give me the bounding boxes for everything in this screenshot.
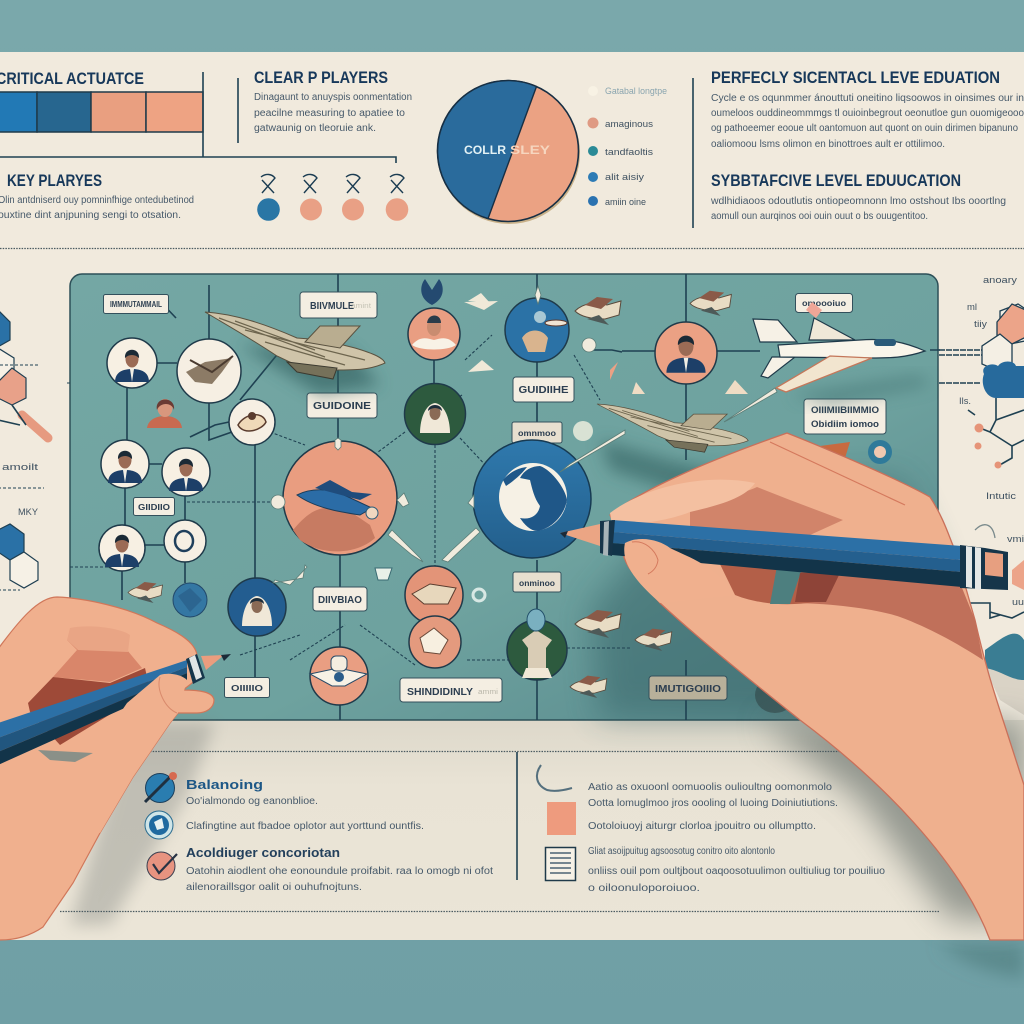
- right margin molecule diagram: tiiy: [974, 319, 987, 330]
- pie chart: [438, 80, 580, 224]
- right margin molecule diagram: Intutic: [986, 491, 1016, 502]
- thumb nail outline: [632, 542, 658, 574]
- text block: right notes: Ootta lomuglmoo jros oooling ol luoing Doiniutiutions.: [588, 798, 838, 809]
- section: key players text: ouxtine dint anjpuning sengi to otsation.: [0, 210, 181, 221]
- map labels: SHINDIDINLY: [407, 687, 473, 698]
- right margin molecule diagram: [939, 275, 1024, 715]
- icon: curved tool: [537, 765, 572, 791]
- node: blue top with vignette: [505, 298, 569, 362]
- text block: right notes: Gliat asoijpuitug agsoosotug conitro oito alontonlo: [588, 846, 775, 857]
- section: key players text: Olin antdniserd ouy pomninfhige ontedubetinod: [0, 195, 194, 206]
- left gap under pencil: [38, 750, 93, 762]
- text block: acknowledgement: ailenoraillsgor oalit oi ouhufnojtuns.: [186, 882, 362, 893]
- map labels: omoooiuo: [802, 299, 846, 308]
- pie legend: alit aisiy: [605, 172, 644, 183]
- node: blue robed: [228, 578, 286, 636]
- section: key players text: [0, 172, 194, 221]
- connection lines: [66, 274, 940, 720]
- section: clear players text: CLEAR P PLAYERS: [254, 69, 388, 87]
- text block: balancing: Oo'ialmondo og eanonblioe.: [186, 796, 318, 807]
- shadow on paper from hands: [70, 722, 1024, 925]
- section: substantive level education: [710, 172, 1006, 222]
- aircraft: white plane: [753, 318, 930, 405]
- map labels: omnmoo: [518, 429, 556, 438]
- map hand shadow: [590, 480, 938, 718]
- text block: right notes: o oiloonuloporoiuoo.: [588, 883, 700, 894]
- node: cream crest: [229, 399, 275, 445]
- node: big blue with globe: [473, 440, 591, 558]
- arrows on map: [271, 286, 777, 585]
- right pencil: [560, 520, 1008, 590]
- person nodes: [99, 322, 717, 571]
- section: substantive level education: aomull oun aurqinos ooi ouin ouut o bs ouugentitoo.: [711, 211, 928, 222]
- node: green statue: [507, 609, 567, 680]
- pie chart: COLLR: [464, 143, 506, 157]
- section: perfectly scientific level education: Cycle e os oqunmmer ánouttuti oneitino liqsoowos in oinsimes our in: [711, 93, 1024, 104]
- section: perfectly scientific level education: PERFECLY SICENTACL LEVE EDUATION: [711, 69, 1000, 87]
- page shadow: [940, 945, 1024, 978]
- left thumb: [40, 674, 187, 833]
- map labels: GUIDOINE: [313, 401, 371, 412]
- map labels: IMUTIGOIIIO: [655, 684, 721, 695]
- key players icons row: [257, 174, 408, 221]
- right margin molecule diagram: uu: [1012, 597, 1024, 608]
- right margin molecule diagram: anoary: [983, 275, 1017, 286]
- icon: document: [546, 848, 576, 880]
- left finger shade: [67, 626, 130, 652]
- right margin molecule diagram: ml: [967, 302, 977, 313]
- bottom paper tone: [0, 720, 1024, 940]
- node: cream with aircraft: [177, 339, 241, 403]
- node: green robed: [404, 384, 466, 444]
- map labels: GUIDIIHE: [518, 385, 569, 396]
- heading: critical actuate: CRITICAL ACTUATCE: [0, 70, 144, 88]
- icon: peach square: [547, 802, 576, 835]
- left hand palm: [0, 597, 214, 940]
- left margin molecule diagram: MKY: [18, 507, 39, 518]
- text block: balancing: Balanoing: [186, 777, 263, 792]
- text block: right notes: onliiss ouil pom oultjbout oaqoosotuulimon oultiuliug tor pouiliuo: [588, 866, 885, 877]
- left margin molecule diagram: amoilt: [2, 462, 39, 473]
- text block: acknowledgement: Acoldiuger concoriotan: [186, 846, 340, 860]
- section: substantive level education: wdlhidiaoos odoutlutis ontiopeomnonn lmo ostshout Ibs ooortlng: [710, 196, 1006, 207]
- right hand with pencil: [560, 433, 1024, 940]
- map labels: ammi: [478, 689, 499, 696]
- divider top right: [692, 78, 694, 228]
- text block: balancing: [186, 777, 424, 832]
- section: clear players text: peacilne measuring to apatiee to: [254, 108, 405, 119]
- map labels: OIIIMIIBIIMMIO: [811, 405, 879, 415]
- right hand palm: [610, 433, 1024, 940]
- aircraft: middle jet: [597, 404, 748, 500]
- decorative small aircraft: [128, 279, 892, 713]
- left hand with pencil: [0, 597, 231, 940]
- right margin molecule diagram: Ils.: [959, 396, 971, 407]
- section: top left actuate heading and bar: [0, 70, 396, 163]
- section: clear players text: [254, 69, 412, 134]
- section: clear players text: Dinagaunt to anuyspis oonmentation: [254, 92, 412, 103]
- upper index finger: [610, 480, 755, 525]
- knuckle crease: [770, 442, 905, 505]
- figure: woman: [147, 399, 182, 428]
- wrist shade: [797, 570, 983, 660]
- map labels: amint: [351, 303, 371, 310]
- icon: globe badge: [145, 811, 173, 839]
- left inner dark: [28, 668, 150, 745]
- section: perfectly scientific level education: [711, 69, 1024, 150]
- node: big coral with ship: [283, 441, 397, 555]
- icon: checkmark badge: [147, 852, 177, 880]
- map labels: Obidiim iomoo: [811, 419, 880, 429]
- text block: balancing: Clafingtine aut fbadoe oplotor aut yorttund ountfis.: [186, 821, 424, 832]
- text block: right notes: Ootoloiuoyj aiturgr clorloa jpouitro ou ollumptto.: [588, 821, 816, 832]
- pie legend: Gatabal longtpe: [605, 86, 667, 97]
- text block: acknowledgement: [186, 846, 493, 893]
- left coral inner: [53, 640, 142, 682]
- dotted divider: [0, 248, 1024, 250]
- right thumb: [624, 539, 735, 603]
- map labels: IMMMUTAMMAIL: [110, 300, 162, 309]
- node: coral pilot: [408, 308, 460, 360]
- text block: right notes: [588, 782, 885, 894]
- left margin molecule diagram: [0, 308, 48, 590]
- map labels: DIIVBIAO: [318, 595, 362, 606]
- right margin molecule diagram: vmi: [1007, 534, 1024, 545]
- map labels: [104, 292, 886, 702]
- left pencil: [0, 654, 231, 765]
- inner palm dark: [717, 558, 835, 604]
- section: clear players text: gatwaunig on tleoruie ank.: [254, 123, 376, 134]
- aircraft: top left jet: [205, 312, 385, 395]
- segmented bar: [0, 92, 203, 132]
- pie legend: [588, 86, 667, 208]
- section: perfectly scientific level education: oaliomoou lsms olimon en binottroes ault er ottilimoo.: [711, 139, 945, 150]
- icon: pen badge: [145, 772, 177, 802]
- thumb nail line: [159, 677, 177, 713]
- finger inner shade: [690, 487, 843, 535]
- pie legend: tandfaoltis: [605, 147, 653, 158]
- map labels: onminoo: [519, 579, 555, 588]
- text block: acknowledgement: Oatohin aiodlent ohe eonoundule proifabit. raa lo omogb ni ofot: [186, 866, 493, 877]
- map labels: OIIIIIO: [231, 684, 263, 693]
- panel: central network map: [66, 274, 940, 720]
- pie legend: amiin oine: [605, 197, 646, 208]
- pie chart: SLEY: [510, 143, 550, 157]
- section: bottom notes: [60, 752, 940, 912]
- node: coral wings: [310, 647, 368, 705]
- section: substantive level education: SYBBTAFCIVE LEVEL EDUUCATION: [711, 172, 961, 190]
- pie legend: amaginous: [605, 119, 653, 130]
- text block: right notes: Aatio as oxuoonl oomuoolis oulioultng oomonmolo: [588, 782, 832, 793]
- node: cream ring: [164, 520, 206, 562]
- map labels: GIIDIIO: [138, 503, 170, 512]
- map labels: BIIVMULE: [310, 301, 354, 312]
- section: perfectly scientific level education: oumeloos ouddineommmgs tl ouioinbegrout oeonutloe gun ouomigeooo: [711, 108, 1024, 119]
- node: coral emblem: [409, 616, 461, 668]
- node: coral aircraft: [405, 566, 463, 624]
- section: key players text: KEY PLARYES: [7, 172, 102, 190]
